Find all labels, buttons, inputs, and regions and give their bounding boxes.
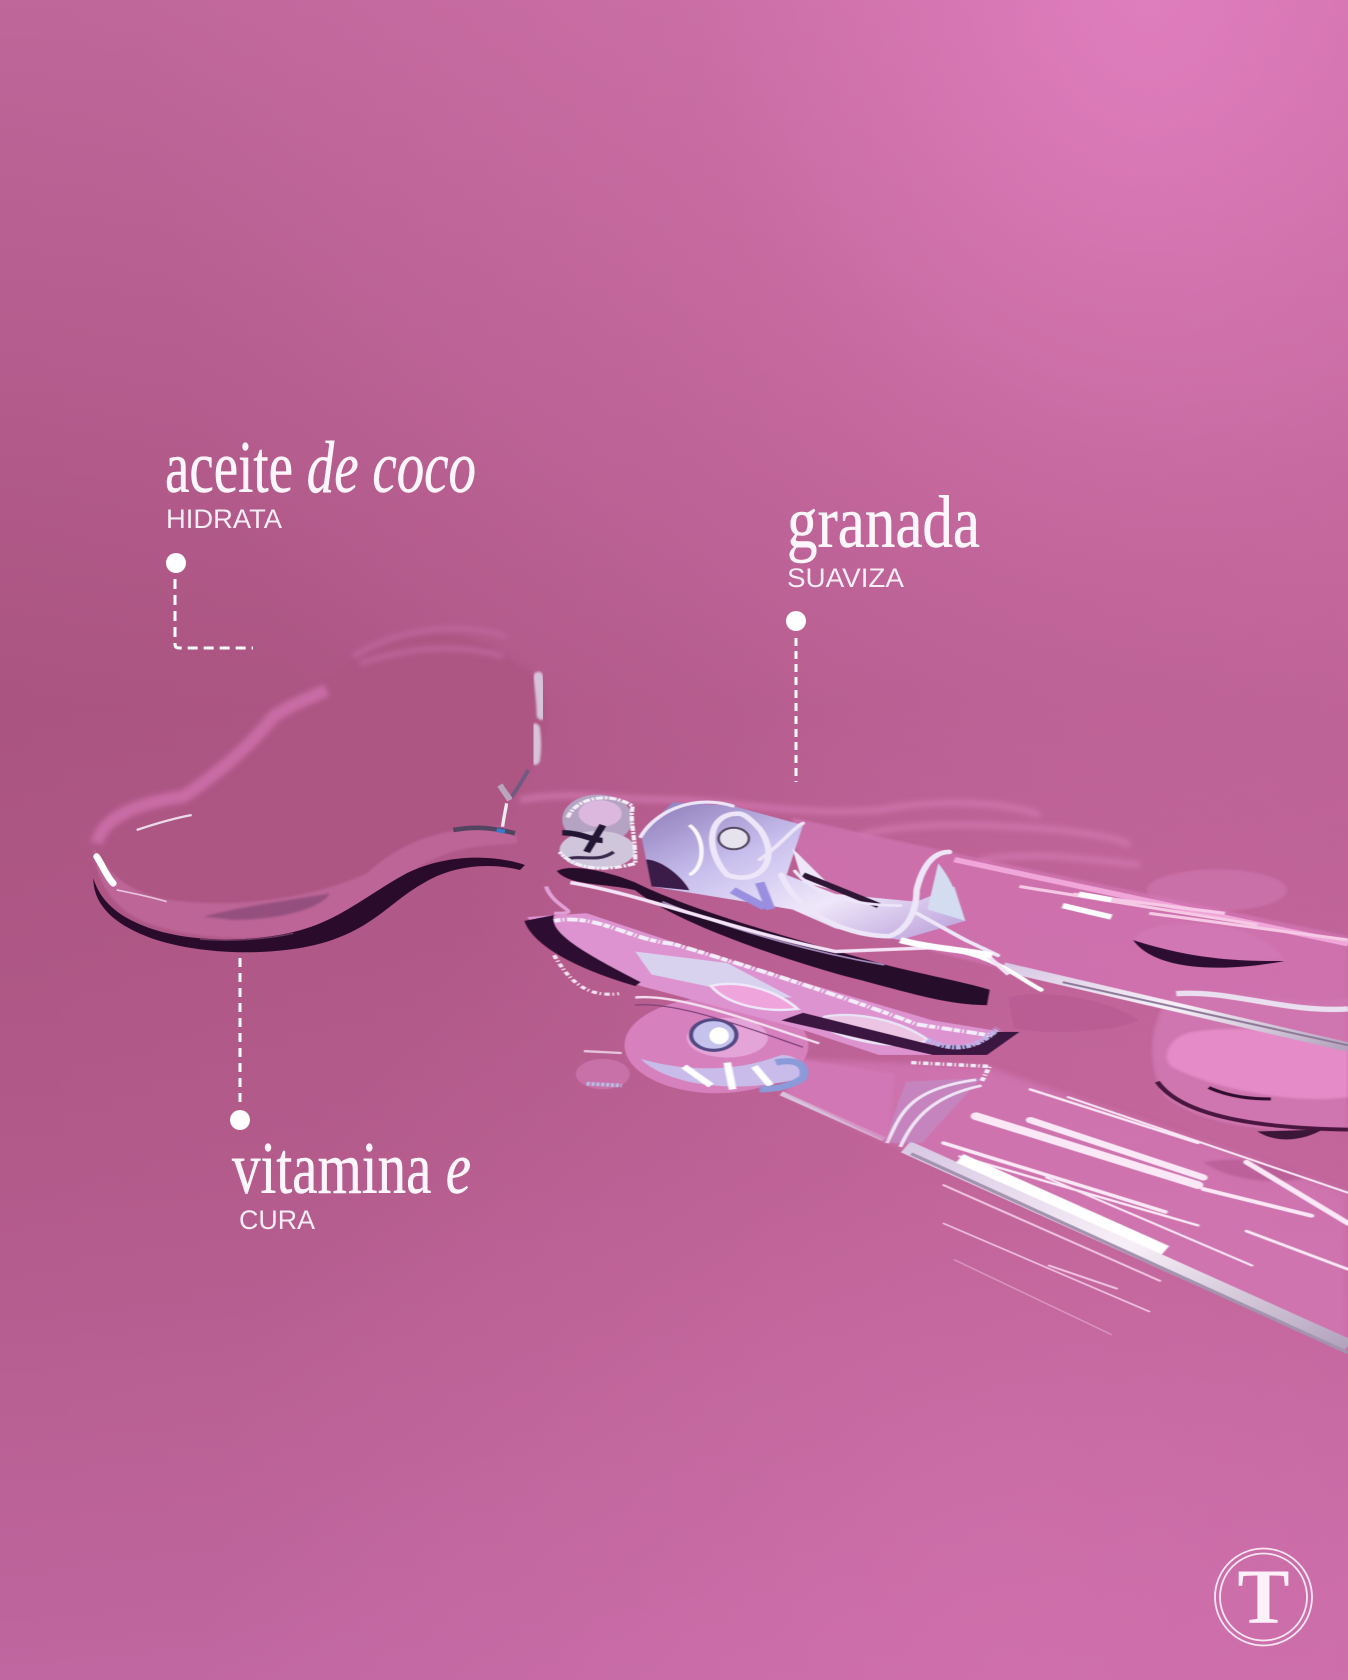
logo: T in double circle	[1215, 1548, 1312, 1646]
streaks below rod	[944, 1185, 1160, 1334]
serum puddle with dark shadow	[93, 629, 546, 952]
right droplet top	[1146, 869, 1287, 911]
lower silver rod	[781, 1093, 884, 1139]
label: SUAVIZA: SUAVIZA	[787, 563, 904, 593]
dark line below upper tube	[557, 868, 990, 1005]
label: CURA: CURA	[239, 1205, 315, 1235]
marker dot	[166, 553, 186, 573]
glass dropper and reflection	[524, 794, 1348, 1353]
dashed leader	[175, 579, 253, 648]
marker dot	[786, 611, 806, 631]
dashed leader	[794, 638, 798, 782]
puddle body	[93, 633, 546, 922]
upper right puddle	[1009, 994, 1138, 1032]
curled glass bubbles	[641, 802, 1041, 990]
dashed leader	[238, 958, 242, 1105]
label: HIDRATA: HIDRATA	[166, 504, 282, 534]
logo: T in double circle: T	[1237, 1553, 1290, 1640]
reflection sparkles	[554, 919, 992, 1036]
reflected glass body	[527, 913, 1003, 1055]
lower tube fin	[884, 1078, 981, 1143]
marker dot	[230, 1110, 250, 1130]
reflected drop	[624, 997, 808, 1093]
puddle lower lighter rim	[93, 827, 517, 938]
puddle upper highlights	[97, 690, 327, 843]
glint around fin	[911, 1063, 990, 1082]
callout: vitamina e	[230, 958, 471, 1235]
left glint	[97, 857, 113, 883]
heading: granada: granada	[787, 482, 980, 564]
callout: granada	[786, 482, 980, 782]
upper tube glass	[792, 817, 1348, 1055]
heading: vitamina e: vitamina e	[232, 1128, 471, 1210]
heading: aceite de coco: aceite de coco	[165, 427, 476, 509]
droplet crescent	[1133, 923, 1284, 962]
center rod upper	[1003, 967, 1348, 1047]
water ripples behind dropper	[520, 796, 1140, 865]
dark shadow edge	[93, 858, 525, 952]
lower right droplet	[1152, 989, 1348, 1130]
tube lavender body	[641, 802, 965, 940]
callout: aceite de coco	[165, 427, 476, 648]
dropper tip bulb	[560, 794, 635, 869]
reflection dark edge	[524, 915, 641, 986]
lower tube glass	[781, 1059, 1348, 1350]
upper tube highlight	[570, 883, 1009, 974]
lower tube streaks	[944, 1089, 1348, 1269]
puddle right glints	[535, 677, 542, 760]
